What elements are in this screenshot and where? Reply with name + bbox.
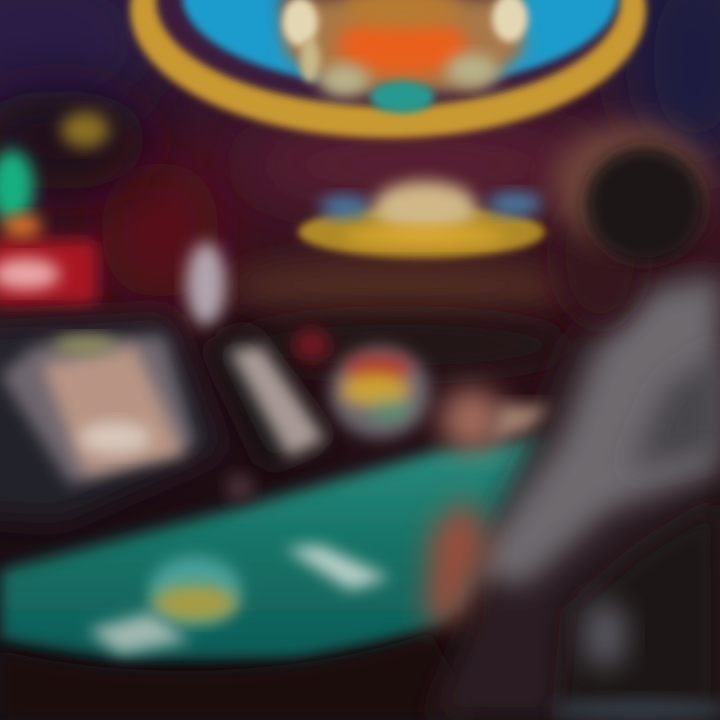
slot machine middle — [205, 325, 335, 470]
person — [425, 123, 720, 720]
slot machine left — [0, 315, 220, 520]
left neon sign — [0, 150, 98, 306]
table cards and chips — [88, 474, 390, 655]
red accent — [294, 329, 330, 361]
table rim — [0, 632, 480, 720]
small yellow light — [61, 112, 109, 148]
white glow behind machines — [186, 242, 226, 326]
person hands — [440, 388, 504, 452]
ceiling chandelier — [130, 0, 646, 138]
green table — [0, 435, 560, 660]
slot machine right — [330, 346, 430, 438]
person head — [556, 185, 644, 325]
distant chandelier — [298, 181, 546, 258]
